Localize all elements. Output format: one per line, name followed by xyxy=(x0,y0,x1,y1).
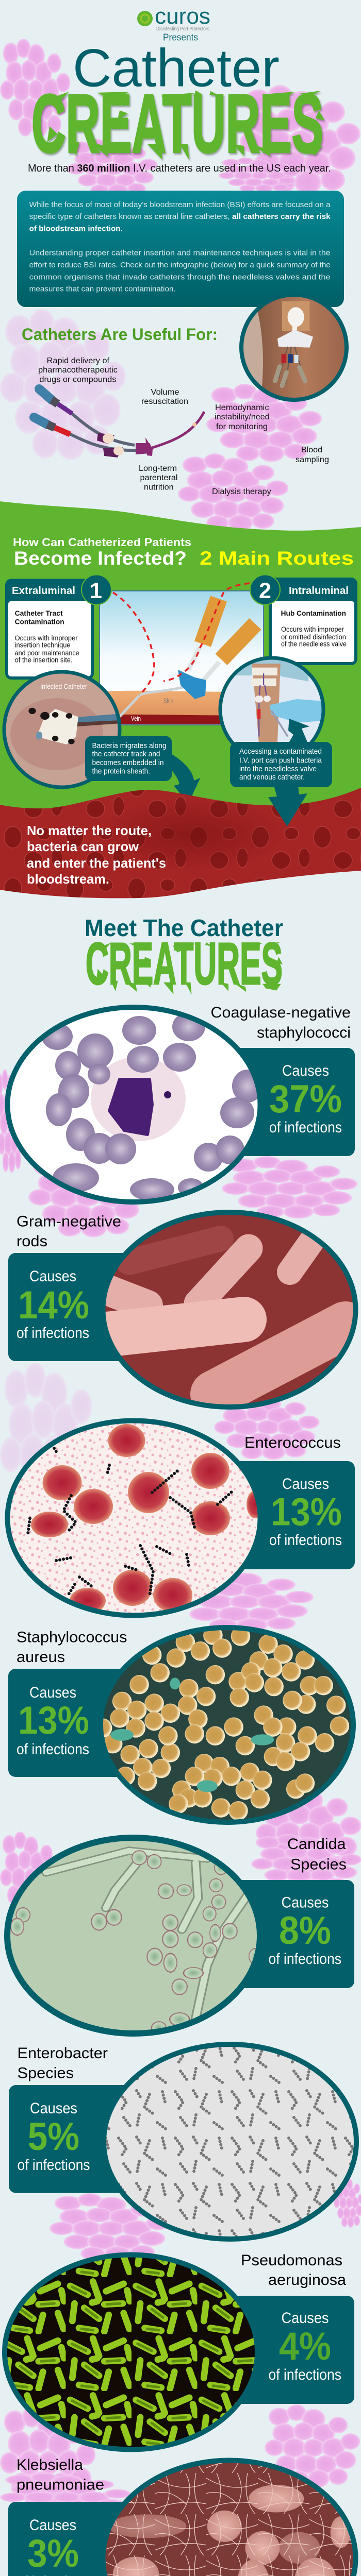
callout: up arrow to port xyxy=(288,719,309,744)
callout: accessing a contaminated port: and venous catheter. xyxy=(239,773,305,782)
panel: introduction: measures that can prevent contamination. xyxy=(29,285,176,294)
list: catheter uses: sampling xyxy=(296,455,329,464)
photo: staph spheres xyxy=(103,1630,351,1820)
label: vein: Vein xyxy=(131,715,141,722)
text: no matter the route xyxy=(27,823,166,887)
panel: route 1 extraluminal: insertion technique xyxy=(15,641,71,649)
card: enterococcus xyxy=(0,1412,355,1623)
logo: curos header: Disinfecting Port Protectors xyxy=(156,26,209,32)
stat box: 5 percent: of infections xyxy=(18,2157,90,2174)
stat box: 4 percent xyxy=(222,2296,354,2404)
stat box: 5 percent xyxy=(9,2085,135,2193)
list: catheter uses xyxy=(38,357,329,496)
list: catheter uses: for monitoring xyxy=(216,422,268,431)
photo: pseudomonas rods xyxy=(5,2255,257,2449)
badge: number 1: 1 xyxy=(90,579,102,603)
card: candida species xyxy=(0,1832,354,2038)
photo: rods xyxy=(105,1215,353,1404)
photo: infected catheter: Infected Catheter xyxy=(40,682,87,690)
panel: route 1 extraluminal: of the insertion site. xyxy=(15,656,73,664)
card: coagulase-negative staphylococci xyxy=(0,999,355,1206)
list: catheter uses: Rapid delivery of xyxy=(47,357,110,365)
list: catheter uses: pharmacotherapeutic xyxy=(38,366,118,375)
route line: extraluminal dashed path xyxy=(113,592,154,695)
panel: introduction: Understanding proper catheter insertion and maintenance techniques is vital in the xyxy=(29,249,331,258)
photo: enterococcus chains xyxy=(10,1423,258,1613)
photo: infected catheter xyxy=(0,667,124,791)
stat box: 13 percent xyxy=(222,1461,355,1569)
panel: introduction: While the focus of most of today’s bloodstream infection (BSI) efforts are focused on a xyxy=(29,200,331,209)
card: pseudomonas aeruginosa xyxy=(5,2252,354,2449)
stat box: 8 percent xyxy=(222,1880,354,1988)
stat box: 14 percent: 14% xyxy=(18,1283,89,1327)
heading: how can patients become infected: How Can Catheterized Patients xyxy=(13,536,191,549)
stat box: 37 percent: of infections xyxy=(269,1119,342,1136)
badge: number 2 xyxy=(250,575,280,605)
section: red bloodstream band xyxy=(0,788,361,898)
name: candida species: Species xyxy=(290,1856,347,1873)
name: enterobacter species: Enterobacter xyxy=(18,2045,108,2062)
list: catheter uses: Volume xyxy=(151,388,179,397)
panel: introduction: effort to reduce BSI rates. Check out the infographic (below) for a quick summary of the xyxy=(29,261,331,269)
stat box: 8 percent: of infections xyxy=(268,1951,341,1968)
stat box: 4 percent: Causes xyxy=(282,2310,329,2327)
logo: curos header xyxy=(137,4,210,32)
callout: bacteria migrates: becomes embedded in xyxy=(92,758,164,767)
badge: number 2: 2 xyxy=(259,579,271,603)
callout: bacteria migrates xyxy=(85,736,172,781)
stat box: 4 percent: 4% xyxy=(279,2325,331,2368)
stat box: 37 percent xyxy=(222,1048,355,1156)
stat box: 3 percent: 3% xyxy=(27,2532,79,2575)
subtitle: 360 million catheters: More than 360 million I.V. catheters are used in the US each year. xyxy=(28,163,331,174)
title: Catheter: Catheter xyxy=(73,39,280,98)
name: klebsiella pneumoniae: pneumoniae xyxy=(17,2476,104,2494)
card: klebsiella pneumoniae xyxy=(8,2455,361,2576)
stat box: 37 percent: Causes xyxy=(282,1062,329,1079)
illustration: catheter entering the vein xyxy=(100,583,264,725)
stat box: 13 percent: of infections xyxy=(269,1532,342,1549)
card: gram-negative rods xyxy=(8,1208,361,1412)
list: catheter uses: parenteral xyxy=(140,473,177,482)
panel: introduction: of bloodstream infection. xyxy=(29,225,123,233)
heading: catheters are useful for: Catheters Are Useful For: xyxy=(22,325,218,344)
stat box: 13 percent: Causes xyxy=(29,1684,76,1701)
presents label: Presents xyxy=(163,32,198,42)
badge: number 1 xyxy=(81,575,111,605)
panel: introduction: common organisms that invade catheters through the needleless valves and the xyxy=(29,273,331,282)
section: green infection routes background xyxy=(0,501,361,824)
text: no matter the route: bacteria can grow xyxy=(27,839,139,854)
photo: candida hyphae xyxy=(10,1841,257,2030)
stat box: 13 percent xyxy=(8,1669,134,1777)
panel: route 2 intraluminal: Intraluminal xyxy=(289,585,349,597)
route line: intraluminal dashed path xyxy=(163,583,250,681)
name: staphylococcus aureus: aureus xyxy=(17,1649,65,1666)
stat box: 14 percent: Causes xyxy=(29,1268,76,1285)
name: coagulase-negative: staphylococci xyxy=(257,1024,351,1041)
stat box: 13 percent: 13% xyxy=(18,1699,89,1742)
callout: accessing a contaminated port: I.V. port can push bacteria xyxy=(239,756,322,765)
panel: route 1 extraluminal: Occurs with improper xyxy=(15,634,78,642)
name: staphylococcus aureus: Staphylococcus xyxy=(17,1629,127,1646)
list: catheter uses: Blood xyxy=(301,446,322,454)
panel: route 1 extraluminal: Extraluminal xyxy=(12,585,75,597)
name: staphylococcus aureus xyxy=(17,1629,127,1666)
stat box: 8 percent: 8% xyxy=(279,1909,331,1953)
name: pseudomonas aeruginosa xyxy=(241,2252,346,2289)
name: coagulase-negative: Coagulase-negative xyxy=(210,1004,351,1021)
stat box: 13 percent: of infections xyxy=(17,1741,89,1758)
list: catheter uses: resuscitation xyxy=(141,397,188,406)
label: skin: Skin xyxy=(163,697,173,705)
name: candida species xyxy=(287,1836,347,1873)
callout: bacteria migrates: Bacteria migrates along xyxy=(92,741,166,750)
heading: how can patients become infected: Become Infected? xyxy=(14,548,187,569)
panel: route 1 extraluminal: Contamination xyxy=(15,618,64,625)
illustration: catheter device xyxy=(34,389,204,457)
name: pseudomonas aeruginosa: Pseudomonas xyxy=(241,2252,342,2269)
name: gram-negative rods: Gram-negative xyxy=(17,1213,121,1230)
text: no matter the route: No matter the route, xyxy=(27,823,152,838)
name: enterobacter species: Species xyxy=(18,2065,74,2082)
panel: route 1 extraluminal xyxy=(5,575,111,680)
arrow: intraluminal route into bloodstream xyxy=(268,786,307,826)
panel: route 2 intraluminal xyxy=(250,575,357,665)
list: catheter uses: Long-term xyxy=(139,464,177,473)
name: enterobacter species xyxy=(18,2045,108,2082)
panel: route 2 intraluminal: of the needleless valve xyxy=(281,640,347,648)
arrow: extraluminal route into bloodstream xyxy=(172,754,200,804)
card: staphylococcus aureus xyxy=(8,1623,358,1826)
name: klebsiella pneumoniae: Klebsiella xyxy=(17,2456,83,2473)
stat box: 13 percent: Causes xyxy=(282,1476,329,1493)
name: pseudomonas aeruginosa: aeruginosa xyxy=(268,2272,346,2289)
callout: accessing a contaminated port: into the needleless valve xyxy=(239,765,317,773)
photo: gloved hand accessing IV port xyxy=(219,656,325,744)
stat box: 37 percent: 37% xyxy=(269,1077,342,1121)
photo: blood smear xyxy=(10,1010,258,1199)
panel: route 2 intraluminal: Occurs with improper xyxy=(281,625,344,633)
panel: introduction xyxy=(17,191,344,307)
list: catheter uses: instability/need xyxy=(215,413,270,421)
heading: meet the catheter: Meet The Catheter xyxy=(85,914,283,941)
stat box: 5 percent: Causes xyxy=(30,2100,77,2117)
name: enterococcus: Enterococcus xyxy=(244,1434,341,1451)
photo: patient with central line xyxy=(239,297,349,402)
stat box: 14 percent: of infections xyxy=(17,1325,89,1342)
list: catheter uses: drugs or compounds xyxy=(39,376,116,384)
name: candida species: Candida xyxy=(287,1836,346,1853)
list: catheter uses: Hemodynamic xyxy=(215,403,269,412)
list: catheter uses: nutrition xyxy=(144,483,174,492)
list: catheter uses: Dialysis therapy xyxy=(212,487,271,496)
stat box: 5 percent: 5% xyxy=(28,2115,79,2159)
logo: curos header: curos xyxy=(155,4,210,29)
card: enterobacter species xyxy=(9,2044,356,2239)
callout: accessing a contaminated port xyxy=(230,742,332,787)
name: gram-negative rods: rods xyxy=(17,1233,47,1250)
panel: route 1 extraluminal: and poor maintenance xyxy=(15,649,79,657)
callout: bacteria migrates: the protein sheath. xyxy=(92,767,150,776)
stat box: 3 percent: Causes xyxy=(29,2517,76,2534)
text: no matter the route: and enter the patient's xyxy=(27,855,166,871)
name: klebsiella pneumoniae xyxy=(17,2456,104,2494)
photo: enterobacter chains xyxy=(104,2044,356,2239)
panel: route 1 extraluminal: Catheter Tract xyxy=(15,609,63,617)
stat box: 4 percent: of infections xyxy=(268,2366,341,2383)
photo: klebsiella fibers xyxy=(105,2463,353,2576)
stat box: 3 percent xyxy=(8,2502,134,2576)
stat box: 13 percent: 13% xyxy=(271,1490,342,1534)
name: coagulase-negative xyxy=(210,1004,351,1041)
heading: how can patients become infected xyxy=(13,536,354,569)
name: gram-negative rods xyxy=(17,1213,121,1250)
heading: how can patients become infected: 2 Main Routes xyxy=(200,548,354,569)
panel: route 2 intraluminal: or omitted disinfection xyxy=(281,633,346,641)
callout: bacteria migrates: the catheter track and xyxy=(92,750,160,758)
text: no matter the route: bloodstream. xyxy=(27,871,109,887)
stat box: 14 percent xyxy=(8,1253,134,1361)
panel: route 2 intraluminal: Hub Contamination xyxy=(281,609,346,617)
panel: introduction: specific type of catheters known as central line catheters, all catheters carry the risk xyxy=(29,212,331,221)
stat box: 8 percent: Causes xyxy=(282,1894,329,1911)
callout: accessing a contaminated port: Accessing a contaminated xyxy=(239,747,322,756)
